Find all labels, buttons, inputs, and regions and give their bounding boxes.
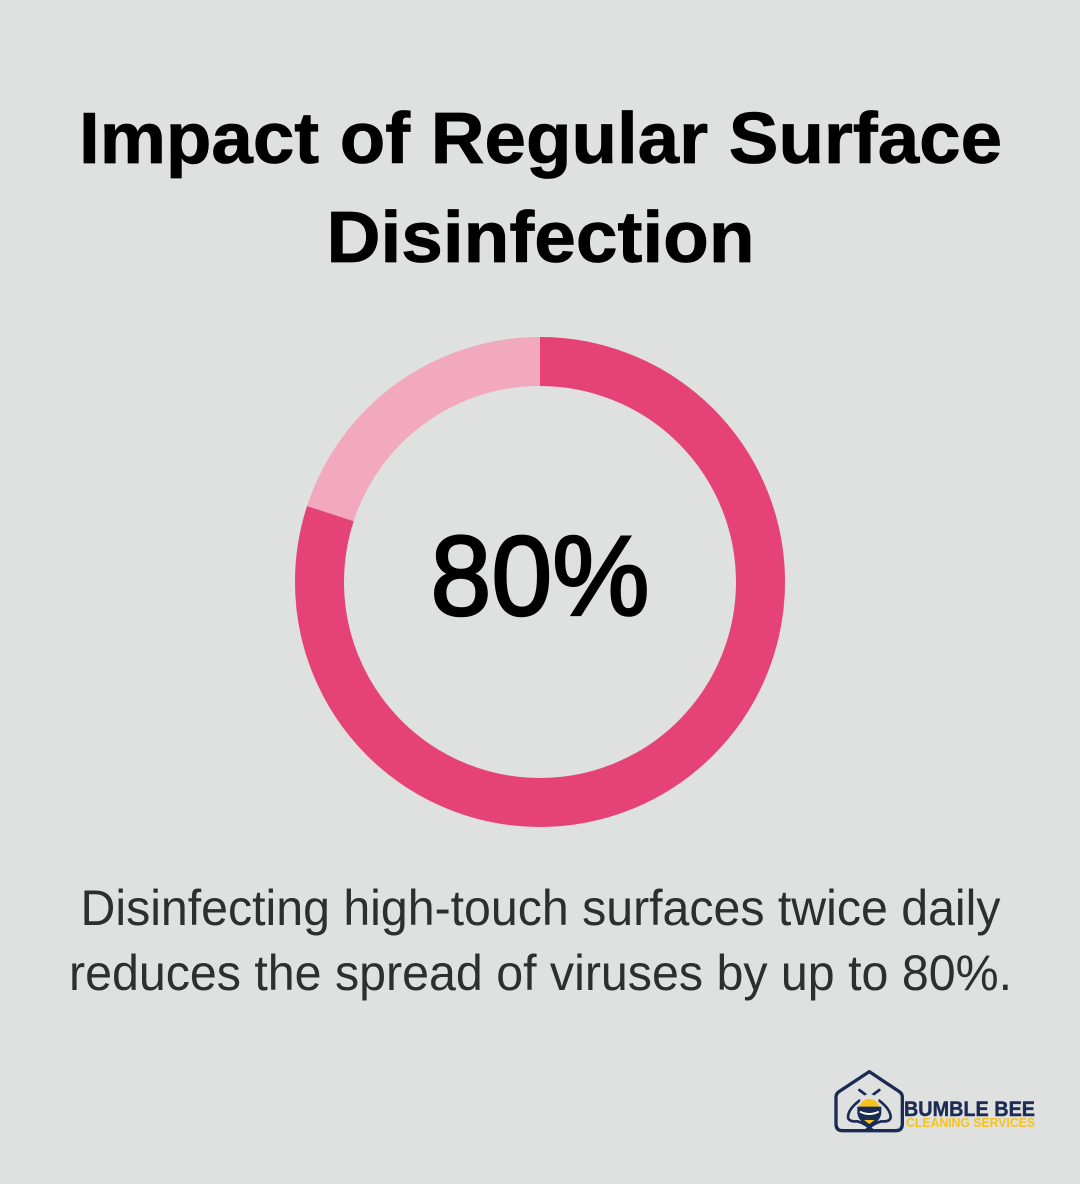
description text: reduces the spread of viruses by up to 80%. (69, 945, 1012, 1001)
description text (69, 880, 1012, 1001)
donut value: 80% (430, 513, 650, 639)
logo tagline: CLEANING SERVICES (906, 1116, 1035, 1130)
icon: bee in house (836, 1072, 902, 1131)
title: Impact of Regular Surface (79, 99, 1002, 179)
description text: Disinfecting high-touch surfaces twice daily (80, 880, 1000, 936)
donut chart: 80% (320, 362, 760, 802)
title (79, 99, 1002, 278)
logo: Bumble Bee Cleaning Services (836, 1072, 1035, 1131)
title: Disinfection (326, 198, 754, 278)
logo name: BUMBLE BEE (904, 1098, 1035, 1121)
